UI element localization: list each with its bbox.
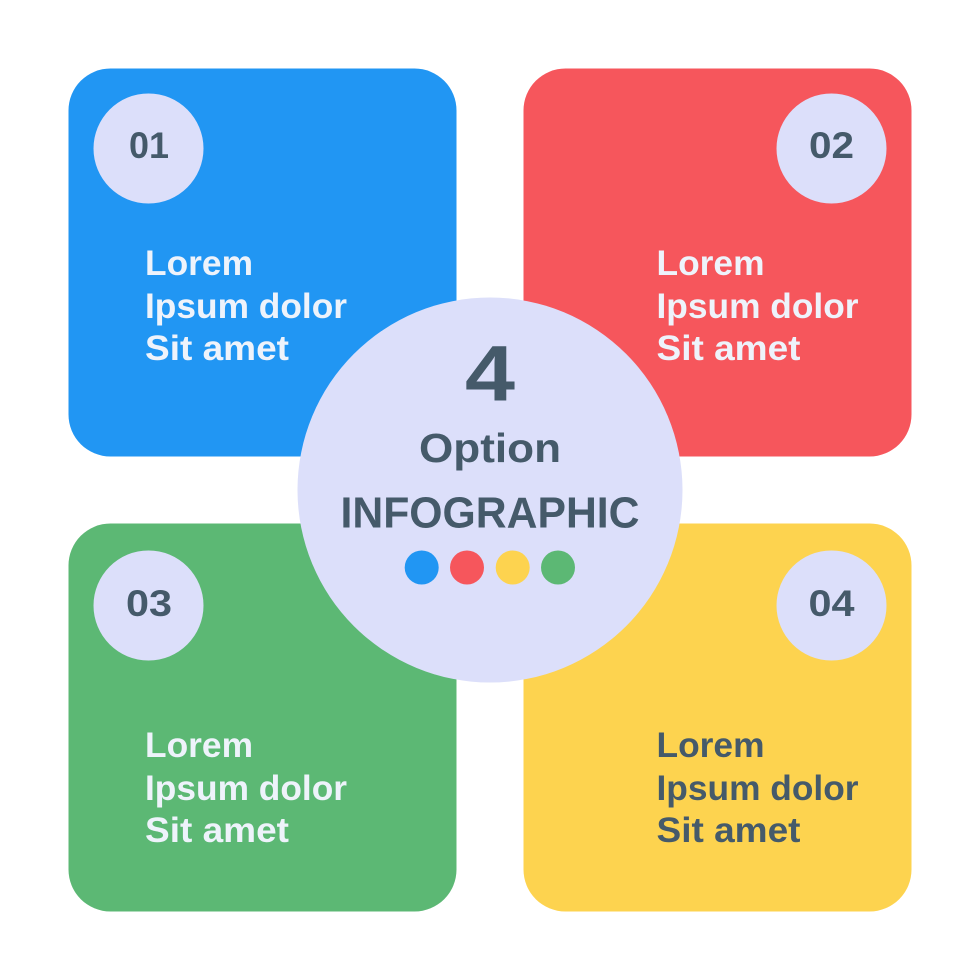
text: option 02: Ipsum dolor [656,287,859,326]
text: option 03: Sit amet [145,811,289,850]
badge: 03: 03 [126,583,172,624]
heading: INFOGRAPHIC: INFOGRAPHIC [340,488,640,538]
badge: 01: 01 [129,125,169,166]
panel: option 01 [68,68,456,456]
text: option 03: Lorem [145,726,253,765]
badge: 01 [94,94,204,204]
badge: 02 [776,94,886,204]
badge: 03 [94,550,204,660]
text: option 04: Sit amet [656,811,801,850]
center circle [298,298,682,682]
heading: Option: Option [419,425,561,471]
text: option 01: Sit amet [145,329,289,368]
text: option 03: Ipsum dolor [145,769,347,808]
text: option 04: Lorem [656,726,764,765]
heading: 4: 4 [465,328,515,418]
text: option 01: Lorem [145,244,253,283]
text: option 04: Ipsum dolor [656,769,859,808]
text: option 02: Sit amet [656,329,801,368]
badge: 04 [776,550,886,660]
panel: option 02 [524,68,912,456]
panel: option 03 [68,524,456,912]
badge: 04: 04 [808,583,855,624]
panel: option 04 [524,524,912,912]
text: option 01: Ipsum dolor [145,287,347,326]
badge: 02: 02 [809,125,854,166]
colour dots [405,550,575,584]
text: option 02: Lorem [656,244,764,283]
